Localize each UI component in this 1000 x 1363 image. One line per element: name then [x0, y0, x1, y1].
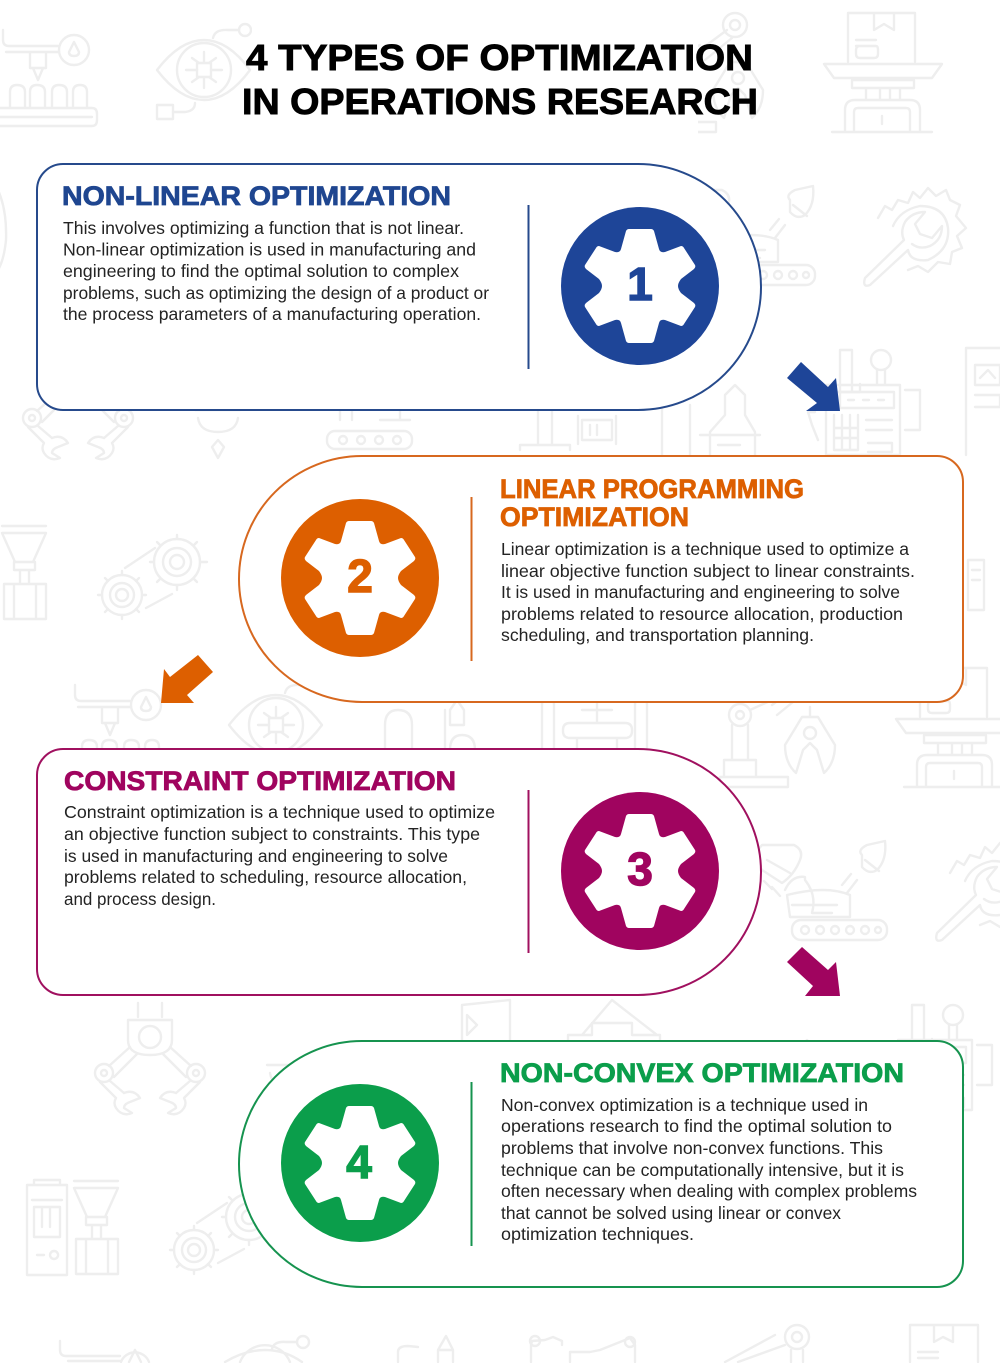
icon: gear number 4	[281, 1084, 439, 1242]
icon: gear number 1: 1	[627, 258, 653, 310]
heading: linear programming optimization: OPTIMIZATION	[500, 502, 689, 532]
text block: linear description: Linear optimization is a technique used to optimize a	[501, 539, 909, 559]
text block: linear description: linear objective function subject to linear constraints.	[501, 561, 915, 581]
icon: gear number 2	[281, 499, 439, 657]
arrow: step 2 to 3	[161, 655, 213, 703]
title	[242, 37, 758, 122]
text block: constraint description: Constraint optimization is a technique used to optimize	[64, 802, 495, 822]
text block: non-linear description: problems, such as optimizing the design of a product or	[63, 283, 489, 303]
icon: gear number 4: 4	[346, 1136, 372, 1188]
text block: non-convex description: operations research to find the optimal solution to	[501, 1116, 892, 1136]
panel: non-linear optimization	[37, 164, 761, 410]
text block: non-convex description: that cannot be solved using linear or convex	[501, 1203, 841, 1223]
title: IN OPERATIONS RESEARCH	[242, 81, 758, 122]
icon: gear number 2: 2	[347, 550, 373, 602]
text block: non-convex description	[501, 1095, 917, 1244]
heading: non-linear optimization: NON-LINEAR OPTIMIZATION	[62, 181, 451, 211]
arrow: step 1 to 2	[787, 362, 840, 411]
heading: non-convex optimization: NON-CONVEX OPTIMIZATION	[500, 1058, 904, 1088]
text block: non-convex description: optimization techniques.	[501, 1224, 694, 1244]
text block: non-linear description: the process parameters of a manufacturing operation.	[63, 304, 481, 324]
text block: non-convex description: technique can be computationally intensive, but it is	[501, 1160, 904, 1180]
heading: linear programming optimization	[500, 474, 804, 532]
text block: non-linear description: This involves optimizing a function that is not linear.	[63, 218, 464, 238]
text block: non-linear description: Non-linear optimization is used in manufacturing and	[63, 240, 476, 260]
text block: non-convex description: often necessary when dealing with complex problems	[501, 1181, 917, 1201]
icon: gear number 3	[561, 792, 719, 950]
arrow: step 3 to 4	[787, 947, 840, 996]
heading: linear programming optimization: LINEAR PROGRAMMING	[500, 474, 804, 504]
text block: linear description: It is used in manufacturing and engineering to solve	[501, 582, 900, 602]
panel: non-convex optimization	[239, 1041, 963, 1287]
text block: constraint description	[64, 802, 495, 909]
text block: linear description	[501, 539, 915, 645]
text block: non-linear description	[63, 218, 489, 324]
icon: gear number 1	[561, 207, 719, 365]
text block: linear description: problems related to resource allocation, production	[501, 604, 903, 624]
text block: non-linear description: engineering to find the optimal solution to complex	[63, 261, 459, 281]
text block: non-convex description: Non-convex optimization is a technique used in	[501, 1095, 868, 1115]
panel: linear programming optimization	[239, 456, 963, 702]
title: 4 TYPES OF OPTIMIZATION	[246, 37, 753, 78]
text block: constraint description: and process design.	[64, 889, 216, 909]
text block: constraint description: problems related to scheduling, resource allocation,	[64, 867, 467, 887]
panel: constraint optimization	[37, 749, 761, 995]
icon: gear number 3: 3	[627, 843, 653, 895]
text block: non-convex description: problems that involve non-convex functions. This	[501, 1138, 883, 1158]
text block: constraint description: an objective function subject to constraints. This type	[64, 824, 480, 844]
text block: linear description: scheduling, and transportation planning.	[501, 625, 814, 645]
heading: constraint optimization: CONSTRAINT OPTIMIZATION	[64, 766, 456, 796]
text block: constraint description: is used in manufacturing and engineering to solve	[64, 846, 448, 866]
